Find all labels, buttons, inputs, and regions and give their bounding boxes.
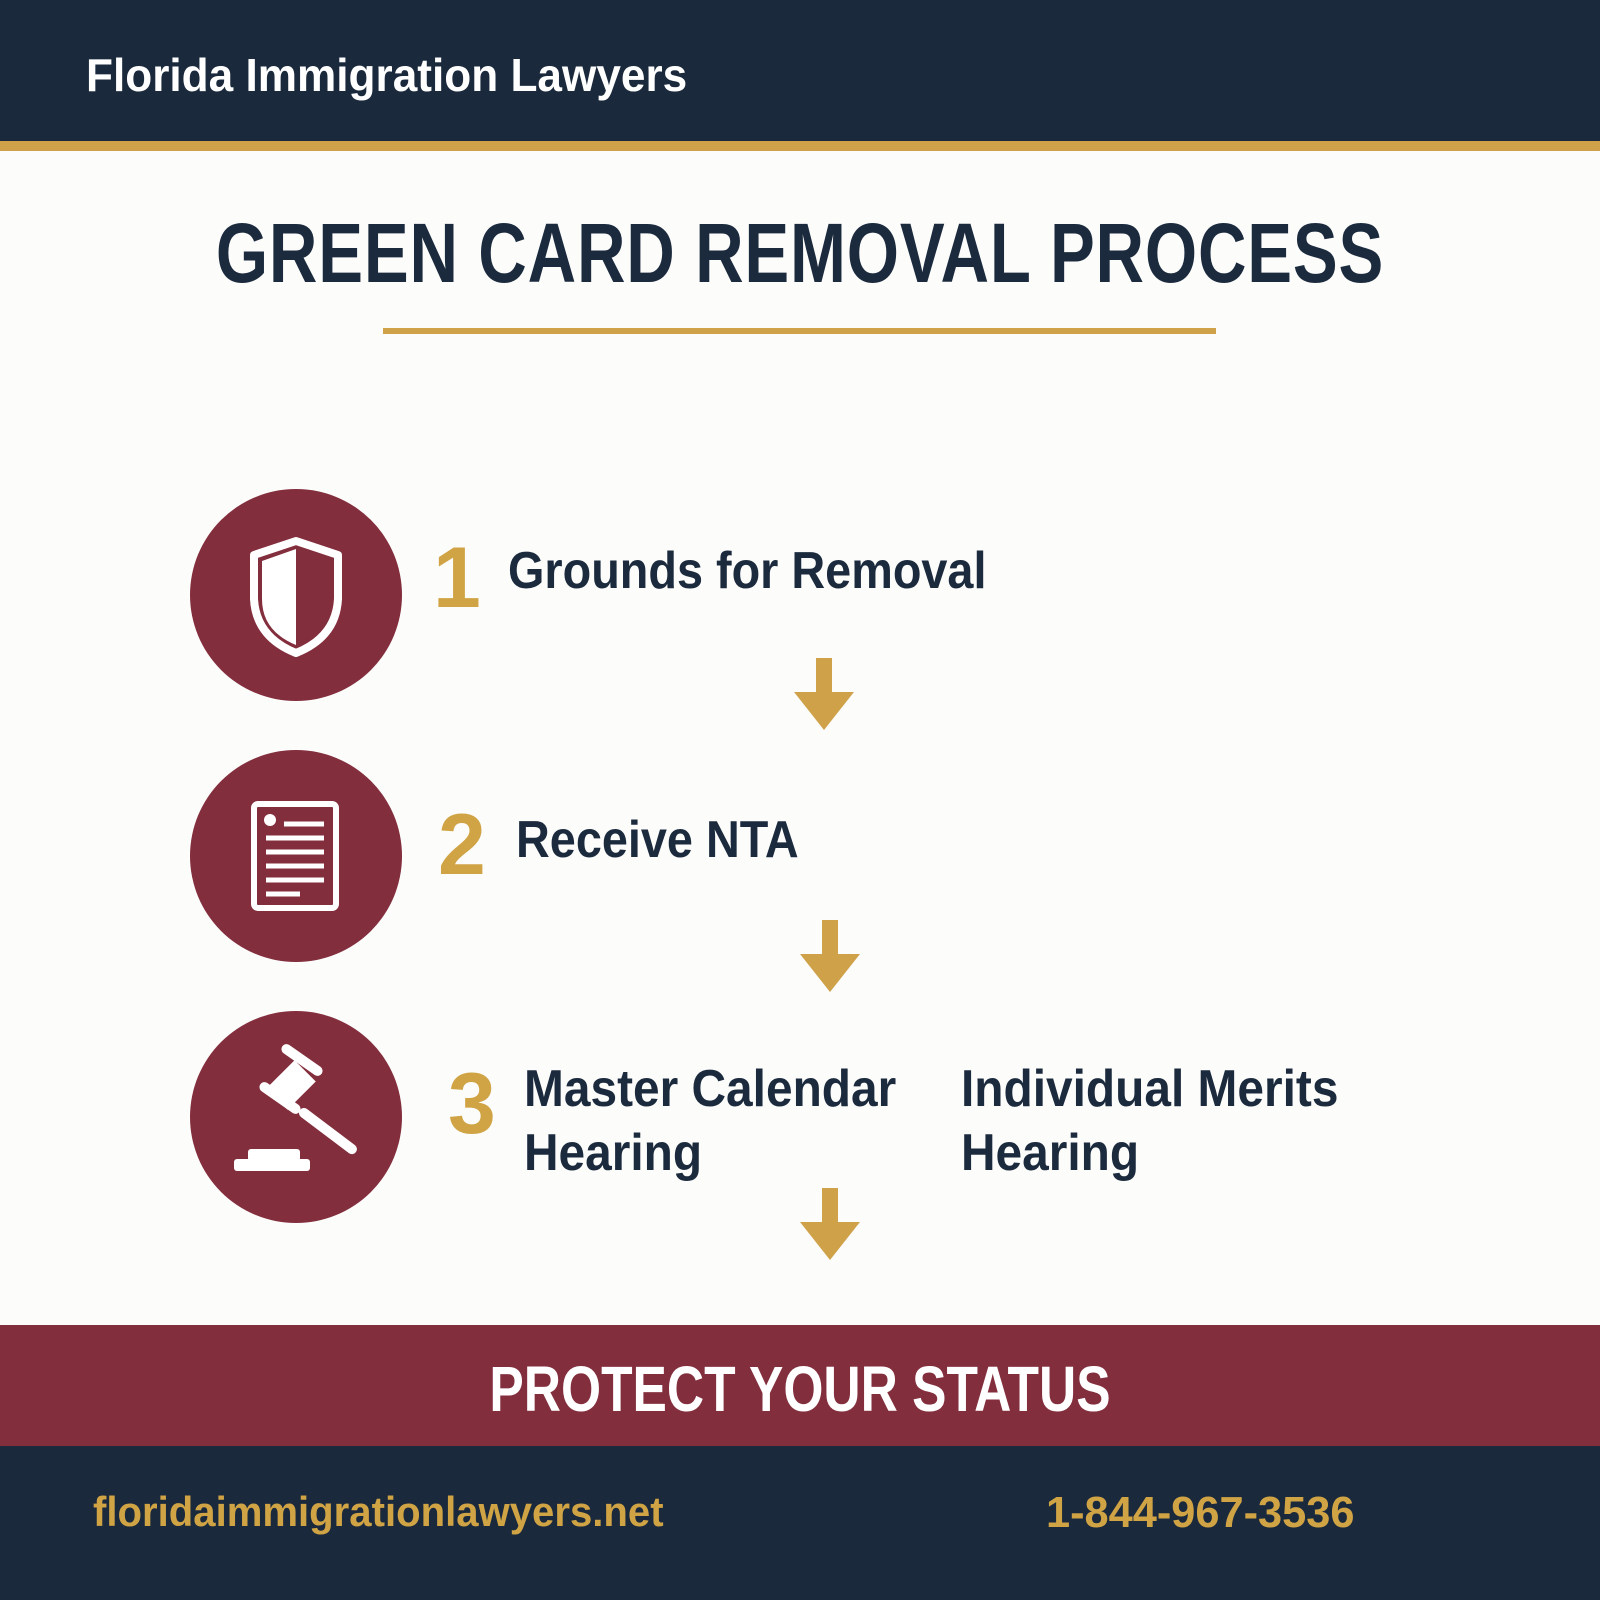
- title: GREEN CARD REMOVAL PROCESS: [216, 206, 1384, 300]
- header bar: [0, 0, 1600, 141]
- step label: master calendar: Master Calendar: [524, 1060, 896, 1118]
- arrow 2: [800, 920, 860, 992]
- step label: master calendar: [524, 1060, 896, 1182]
- step 1: [190, 489, 986, 701]
- number 1: 1: [433, 530, 481, 626]
- step label: individual merits: Hearing: [961, 1124, 1139, 1182]
- icon: document: [190, 750, 402, 962]
- step label: Grounds for Removal: [508, 542, 986, 600]
- header brand: Florida Immigration Lawyers: [86, 49, 687, 101]
- number 2: 2: [438, 797, 486, 893]
- step label: individual merits: [961, 1060, 1338, 1182]
- banner: [0, 1325, 1600, 1446]
- footer: [0, 1446, 1600, 1600]
- step label: master calendar: Hearing: [524, 1124, 702, 1182]
- step 2: [190, 750, 799, 962]
- step label: individual merits: Individual Merits: [961, 1060, 1338, 1118]
- number 3: 3: [448, 1056, 496, 1152]
- footer url: floridaimmigrationlawyers.net: [93, 1488, 664, 1535]
- footer phone: 1-844-967-3536: [1046, 1488, 1354, 1537]
- arrow 3: [800, 1188, 860, 1260]
- banner text: PROTECT YOUR STATUS: [489, 1353, 1111, 1425]
- step label: Receive NTA: [516, 811, 799, 869]
- arrow 1: [794, 658, 854, 730]
- step 3: [190, 1011, 1338, 1223]
- icon: gavel: [190, 1011, 402, 1223]
- icon: shield: [190, 489, 402, 701]
